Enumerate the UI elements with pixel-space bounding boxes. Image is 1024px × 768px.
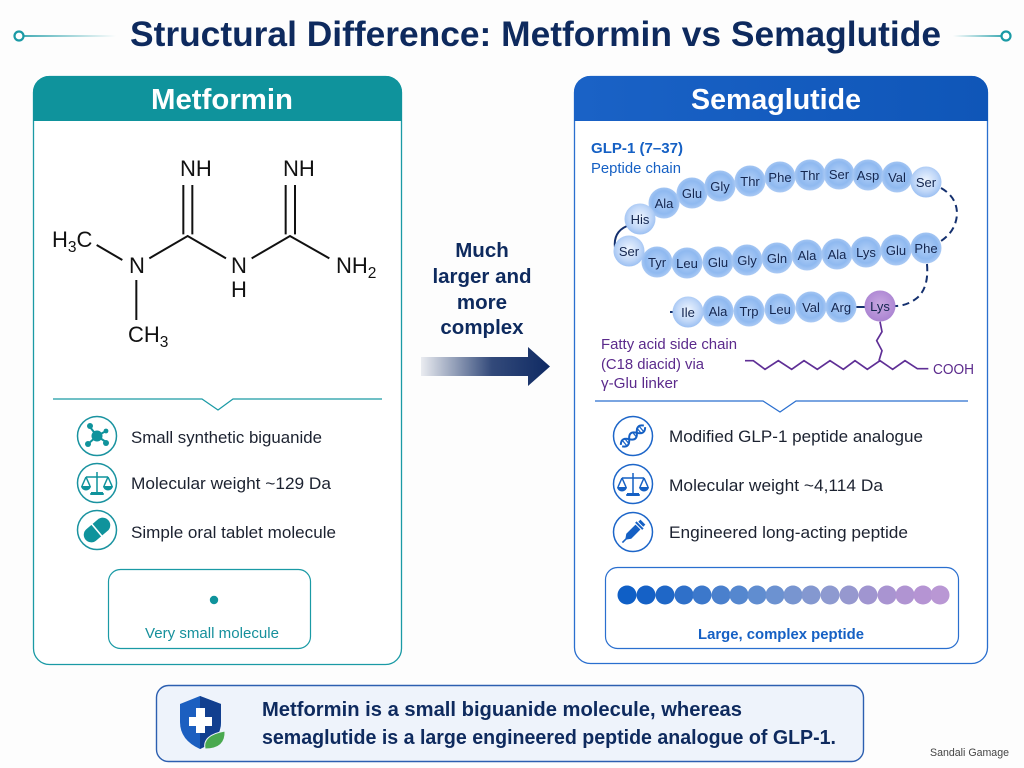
semaglutide size box <box>606 568 958 648</box>
metformin heading: Metformin <box>151 84 293 116</box>
panel: semaglutide <box>574 76 988 664</box>
text: long-acting: Engineered long-acting peptide <box>669 523 908 542</box>
peptide label: GLP-1 (7–37) <box>591 140 683 157</box>
icon: molecule <box>78 416 116 456</box>
peptide beads: Lys <box>856 245 876 260</box>
panel: metformin <box>33 76 402 664</box>
credit: Sandali Gamage <box>930 747 1009 759</box>
metformin structure: 3 <box>160 334 168 351</box>
text: molecular weight: Molecular weight ~4,114 Da <box>669 476 884 495</box>
peptide beads: Ser <box>829 167 850 182</box>
peptide beads: Phe <box>768 170 792 185</box>
metformin header <box>33 76 402 121</box>
conclusion text: Metformin is a small biguanide molecule, whereas <box>262 698 742 721</box>
icon: dropper <box>594 493 672 571</box>
callout: larger and more complex: complex <box>440 316 524 339</box>
peptide beads: Phe <box>914 241 938 256</box>
panel: conclusion <box>156 686 864 762</box>
icon: scale <box>614 464 652 504</box>
callout: larger and more complex: more <box>457 291 507 314</box>
peptide label: Peptide chain <box>591 160 681 177</box>
callout: larger and more complex: Much <box>455 239 509 262</box>
semaglutide size box: Large, complex peptide <box>698 626 864 643</box>
conclusion text: semaglutide is a large engineered peptide analogue of GLP-1. <box>262 726 836 749</box>
semaglutide header <box>574 76 988 121</box>
peptide beads: Trp <box>739 304 759 319</box>
conclusion text <box>262 698 836 749</box>
peptide beads: Thr <box>800 168 820 183</box>
semaglutide heading: Semaglutide <box>691 84 861 116</box>
metformin structure: C <box>77 227 93 252</box>
icon: pill <box>58 491 136 569</box>
fatty acid label: (C18 diacid) via <box>601 357 705 373</box>
metformin structure: 2 <box>368 265 376 282</box>
fatty acid label: γ-Glu linker <box>601 376 678 392</box>
fatty acid chain <box>745 322 974 378</box>
peptide beads: Ala <box>798 248 817 263</box>
peptide beads: Val <box>888 170 906 185</box>
fatty acid label: Fatty acid side chain <box>601 337 737 353</box>
peptide beads: Ser <box>916 175 937 190</box>
peptide beads: Ser <box>619 244 640 259</box>
peptide beads: Asp <box>857 168 879 183</box>
peptide beads: Gly <box>710 179 730 194</box>
text: tablet: Simple oral tablet molecule <box>131 523 336 542</box>
peptide beads: Arg <box>831 300 851 315</box>
metformin size box: Very small molecule <box>145 625 279 642</box>
peptide beads: Tyr <box>648 255 667 270</box>
text: biguanide: Small synthetic biguanide <box>131 428 322 447</box>
icon: shield <box>180 696 225 749</box>
metformin structure: NH <box>283 156 315 181</box>
peptide beads: Ala <box>655 196 674 211</box>
fatty acid label <box>601 337 737 392</box>
title: Structural Difference: Metformin vs Semaglutide <box>130 15 941 54</box>
metformin structure: NH <box>180 156 212 181</box>
peptide beads: Gly <box>737 253 757 268</box>
fatty acid chain: COOH <box>933 361 974 378</box>
text: peptide analogue: Modified GLP-1 peptide analogue <box>669 427 923 446</box>
callout: larger and more complex: larger and <box>432 265 532 288</box>
metformin structure <box>52 156 376 351</box>
title decoration left <box>14 32 116 40</box>
peptide beads: Ala <box>828 247 847 262</box>
metformin structure: CH <box>128 322 160 347</box>
peptide beads: Leu <box>769 302 791 317</box>
peptide beads <box>614 158 942 328</box>
peptide label <box>591 140 683 177</box>
peptide beads: Ile <box>681 305 695 320</box>
icon: scale <box>78 464 116 502</box>
peptide beads: Glu <box>708 255 728 270</box>
metformin size box <box>108 570 310 648</box>
peptide beads: Thr <box>740 174 760 189</box>
metformin structure: N <box>231 253 247 278</box>
callout: larger and more complex <box>421 239 550 386</box>
peptide beads: His <box>631 212 650 227</box>
metformin structure: H <box>52 227 68 252</box>
metformin structure: 3 <box>68 239 77 256</box>
peptide beads: Gln <box>767 251 787 266</box>
metformin structure: NH <box>336 253 368 278</box>
text: molecular weight: Molecular weight ~129 Da <box>131 474 332 493</box>
metformin structure: N <box>129 253 145 278</box>
peptide beads: Glu <box>886 243 906 258</box>
peptide beads: Val <box>802 300 820 315</box>
peptide beads: Glu <box>682 186 702 201</box>
arrow <box>421 347 550 386</box>
peptide beads: Leu <box>676 256 698 271</box>
icon: dna <box>614 416 652 456</box>
peptide beads: Ala <box>709 304 728 319</box>
peptide connectors <box>615 188 957 312</box>
peptide beads: Lys <box>870 299 890 314</box>
title decoration right <box>953 32 1010 40</box>
metformin structure: H <box>231 277 247 302</box>
